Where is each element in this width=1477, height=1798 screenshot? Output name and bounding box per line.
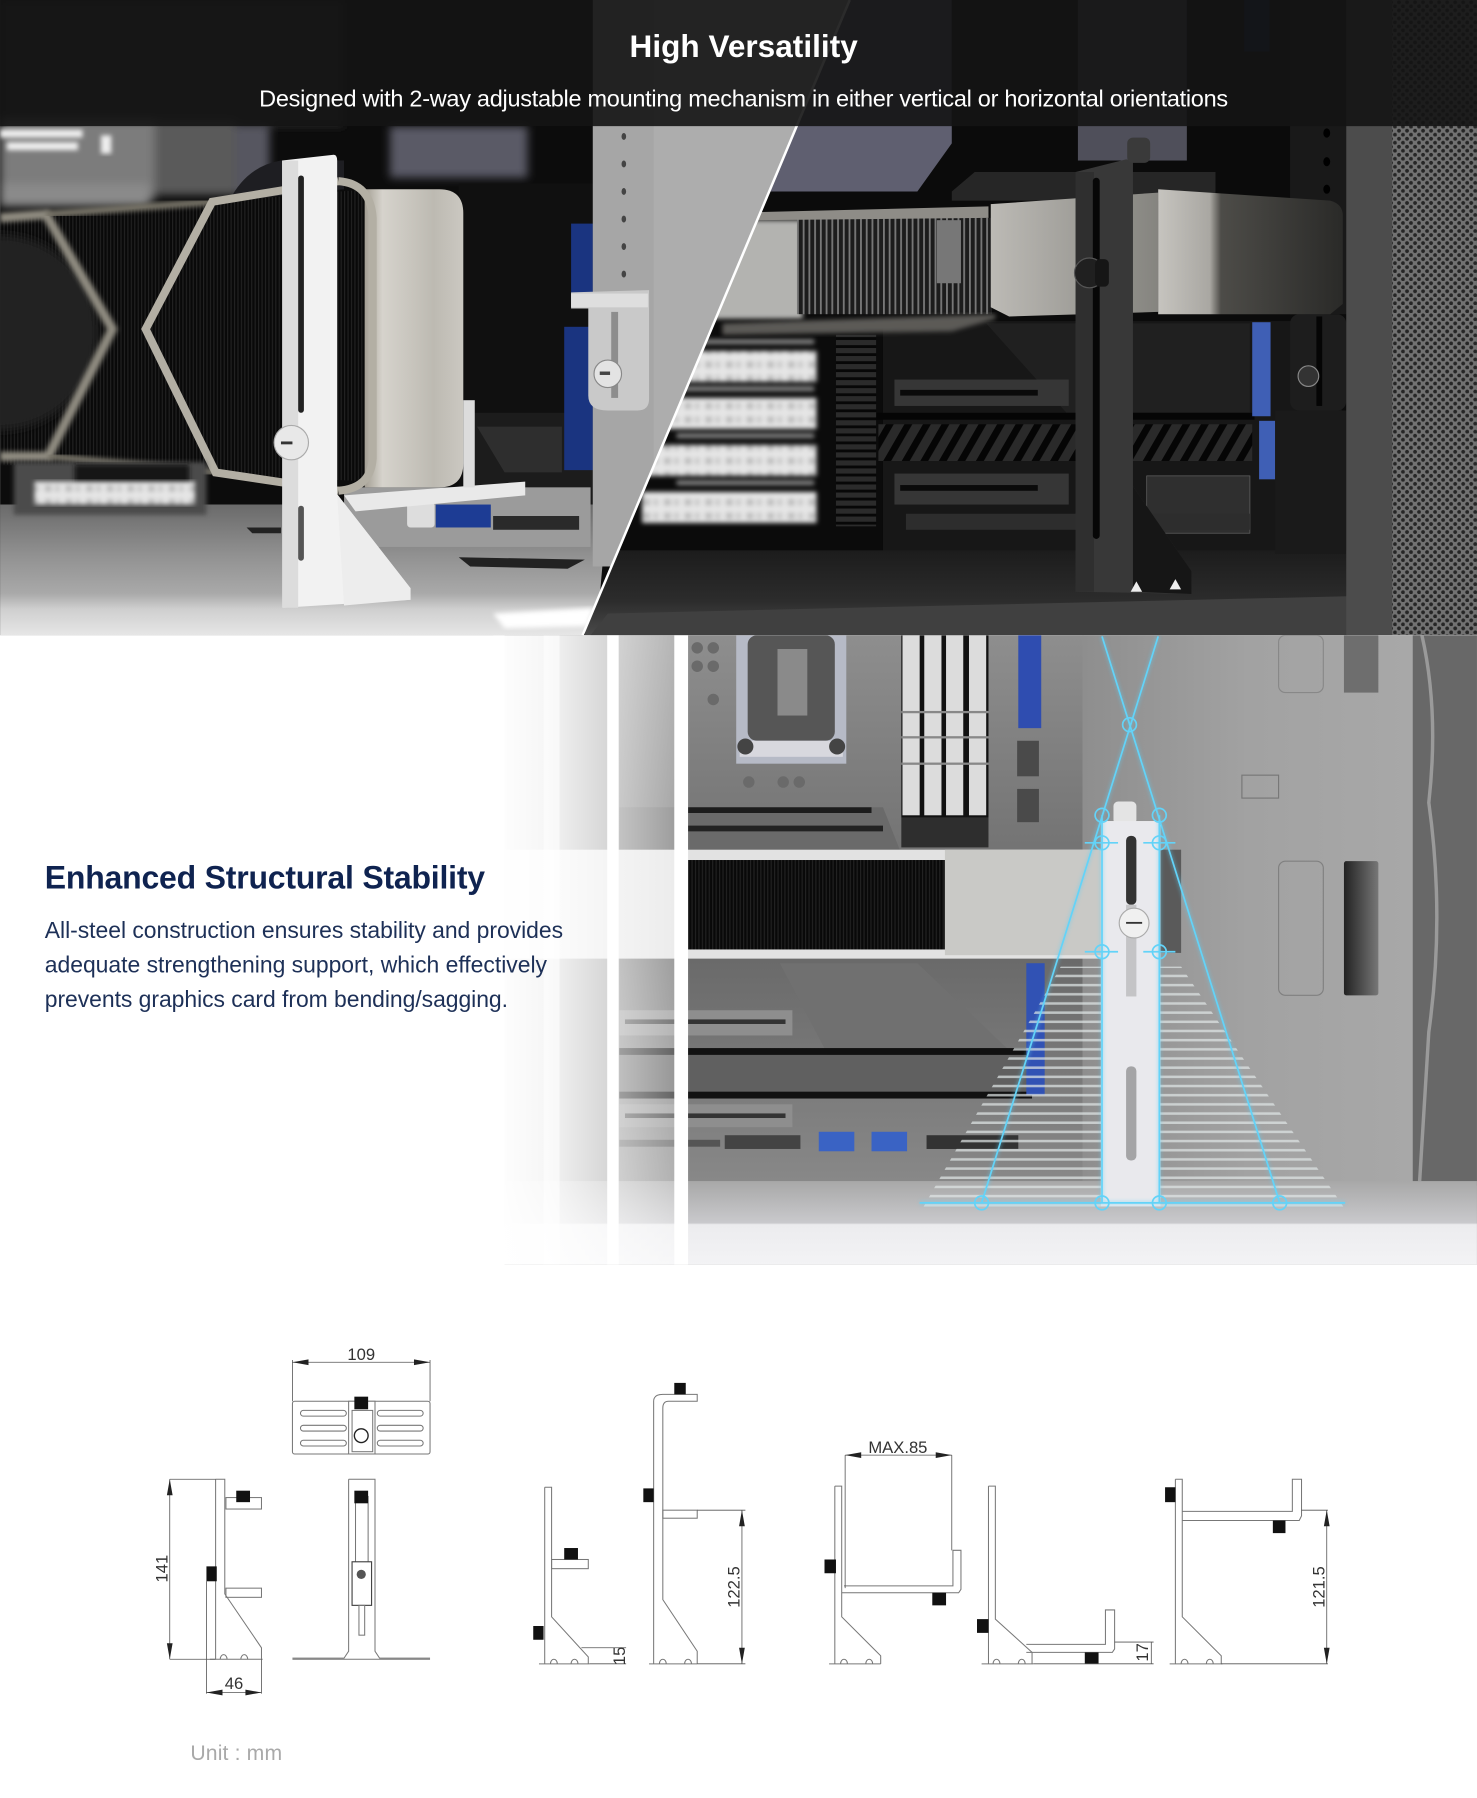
floor slots bbox=[247, 527, 585, 569]
floor bbox=[0, 505, 608, 635]
mesh side panel bbox=[1392, 0, 1477, 635]
blue force lines bbox=[920, 636, 1345, 1210]
motherboard dark zone bbox=[459, 183, 594, 505]
support shelf bbox=[344, 400, 525, 511]
white standoff bbox=[407, 502, 435, 527]
floor bright band bbox=[591, 596, 1347, 635]
white case panel bbox=[593, 0, 872, 566]
panel shade bbox=[592, 126, 610, 566]
gpu top band bbox=[505, 850, 1101, 959]
dark hump above card bbox=[233, 160, 344, 196]
subtitle: Designed with 2-way adjustable mounting mechanism in either vertical or horizontal orientations bbox=[259, 86, 1228, 112]
lavender chassis plate bbox=[757, 0, 952, 191]
pcie slot covers bbox=[642, 339, 816, 523]
drawing: horizontal max width bbox=[825, 1438, 961, 1664]
cable cutout bbox=[1344, 861, 1378, 995]
chassis dark strip bbox=[1290, 0, 1346, 314]
power connector bbox=[937, 220, 961, 283]
heading: stability: Enhanced Structural Stability bbox=[45, 860, 485, 896]
io connectors bbox=[619, 1132, 1018, 1151]
case mount bbox=[1290, 314, 1346, 411]
upper recess outline bbox=[1279, 635, 1323, 693]
drawing: top view bbox=[292, 1345, 430, 1454]
white dots on rear panel bbox=[0, 130, 111, 154]
body text: All-steel construction ensures stability and provides bbox=[45, 917, 563, 943]
connector row bbox=[906, 514, 1250, 530]
heatsink block bbox=[619, 1055, 1032, 1092]
gpu top rail bbox=[757, 206, 988, 220]
body text: prevents graphics card from bending/sagging. bbox=[45, 986, 508, 1012]
silver shroud end bbox=[365, 189, 463, 487]
upper case cutout bbox=[1344, 635, 1378, 693]
diagonal divider bbox=[583, 0, 850, 635]
hatch triangle bbox=[923, 967, 1344, 1207]
board lower strip bbox=[344, 487, 591, 547]
blue connector lower bbox=[1026, 963, 1045, 1095]
drawing: horizontal low bbox=[977, 1486, 1154, 1664]
panel: structural stability photo bbox=[493, 635, 1477, 1265]
motherboard bbox=[619, 635, 1084, 1197]
black bar top bbox=[619, 1048, 1032, 1055]
memory modules bbox=[901, 635, 988, 818]
black gap bbox=[876, 413, 1255, 420]
left white fade bbox=[493, 635, 690, 1265]
black bar bottom bbox=[619, 1092, 1032, 1099]
small tab bbox=[1242, 775, 1279, 798]
panel holes bbox=[622, 133, 626, 277]
m.2 heatsink band bbox=[878, 424, 1252, 461]
cpu socket area bbox=[952, 0, 1078, 126]
mount tab on panel bbox=[571, 290, 649, 411]
white bracket bbox=[1101, 802, 1160, 1206]
drawing: horizontal low: 17 bbox=[1133, 1643, 1152, 1662]
drawing: horizontal high: 121.5 bbox=[1309, 1566, 1328, 1608]
drawing: tall vertical position bbox=[643, 1383, 745, 1664]
diagonal board pattern bbox=[986, 323, 1250, 413]
blue header bbox=[436, 505, 491, 527]
gpu fins bbox=[797, 218, 992, 314]
blue connectors bbox=[1252, 322, 1275, 479]
white support bracket bbox=[274, 155, 411, 608]
drawing: top view: 109 bbox=[347, 1345, 375, 1364]
drawing: side view: 141 bbox=[152, 1555, 171, 1583]
slot plate under gpu bbox=[14, 462, 206, 515]
gpu right block bbox=[1160, 850, 1181, 953]
silver shroud centre bbox=[991, 193, 1158, 316]
strip holes bbox=[1323, 128, 1330, 194]
gpu bottom rail bbox=[722, 314, 995, 335]
drawing: front view bbox=[292, 1479, 430, 1659]
unit label: Unit : mm bbox=[190, 1742, 282, 1765]
body text: adequate strengthening support, which effectively bbox=[45, 951, 548, 977]
wall edge bbox=[1420, 635, 1437, 1181]
vrm heatsink bbox=[619, 807, 900, 851]
floor bbox=[585, 550, 1347, 635]
recessed outline bbox=[1279, 861, 1323, 995]
body text bbox=[45, 917, 563, 1012]
drawing: tall vertical position: 122.5 bbox=[725, 1566, 744, 1608]
drawing: side view bbox=[152, 1479, 263, 1695]
ram slots bbox=[901, 818, 988, 847]
blue power connector bbox=[1244, 0, 1269, 52]
motherboard lower section bbox=[475, 413, 592, 504]
ram sticks behind bbox=[1078, 0, 1187, 161]
vertical fin plate bbox=[836, 335, 876, 526]
pcie slot 1 bbox=[894, 380, 1069, 406]
case panel bbox=[1346, 0, 1392, 635]
panel: dimension drawings bbox=[152, 1345, 1330, 1695]
black support plate bbox=[1074, 138, 1191, 594]
chassis panel bbox=[1083, 635, 1415, 1197]
far right wall bbox=[1413, 635, 1477, 1186]
pcie slot one bbox=[619, 1010, 792, 1035]
gpu shroud bbox=[945, 850, 1102, 955]
graphics card heatsink bbox=[0, 181, 373, 491]
floor bbox=[505, 1181, 1477, 1265]
board diagonal shape bbox=[780, 963, 1032, 1072]
vrm heatsink bbox=[952, 172, 1216, 201]
bright strip bottom bbox=[493, 608, 594, 628]
drawing: horizontal max width: MAX.85 bbox=[868, 1438, 927, 1457]
drawing: side view: 46 bbox=[225, 1674, 243, 1693]
gpu fins bbox=[687, 860, 945, 949]
pcie slot 2 bbox=[894, 474, 1069, 505]
drawing: low vertical position: 15 bbox=[610, 1647, 629, 1665]
cpu socket bbox=[736, 635, 846, 764]
header pins bbox=[493, 516, 579, 530]
motherboard body bbox=[883, 321, 1342, 556]
heatsink hatch bbox=[477, 427, 562, 472]
blue atx connector bbox=[1018, 635, 1041, 728]
blue connector bbox=[564, 224, 593, 470]
shroud frame curve bbox=[338, 181, 373, 491]
blurred case background bbox=[0, 121, 533, 212]
panel: horizontal mount photo (left) bbox=[0, 0, 872, 635]
title bar bbox=[0, 0, 1477, 126]
drawing: horizontal high bbox=[1165, 1479, 1330, 1664]
socket standoff holes bbox=[691, 642, 805, 788]
lower strip bbox=[1275, 411, 1346, 554]
title: High Versatility bbox=[630, 28, 858, 64]
board headers bbox=[1147, 476, 1250, 533]
drawing: low vertical position bbox=[533, 1487, 629, 1665]
panel: vertical mount photo (right) bbox=[573, 0, 1477, 635]
chips bbox=[1017, 741, 1039, 822]
white stripes bbox=[544, 635, 688, 1265]
silver shroud right bbox=[1158, 189, 1343, 314]
blurred left gpu bbox=[705, 220, 803, 319]
pcie slot two bbox=[619, 1104, 792, 1127]
